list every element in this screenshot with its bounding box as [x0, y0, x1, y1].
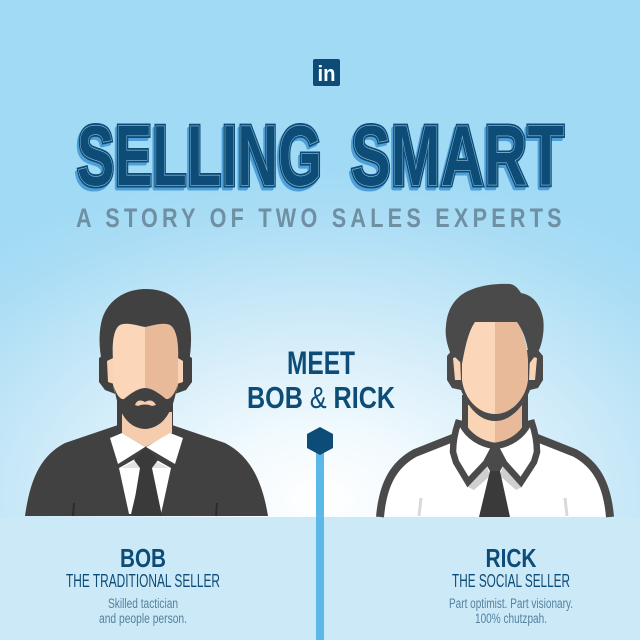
subtitle: A STORY OF TWO SALES EXPERTS	[76, 204, 562, 234]
Rick face left	[462, 320, 495, 414]
text: Bob block	[66, 543, 220, 626]
Bob ears outline	[99, 354, 192, 395]
text: Rick block: RICK	[486, 543, 537, 573]
title: SELLING	[77, 109, 322, 204]
Rick shirt	[380, 436, 610, 517]
title: SELLING	[77, 109, 322, 204]
Rick head outline	[447, 350, 543, 421]
Rick collar	[453, 423, 537, 482]
Bob face right	[145, 324, 178, 430]
Bob shirt	[119, 459, 171, 514]
timeline line	[316, 453, 324, 640]
illustration: Rick	[380, 284, 610, 517]
title: SMART	[351, 109, 564, 204]
Bob hair	[100, 289, 191, 362]
Bob tie	[132, 447, 162, 516]
icon: LinkedIn logo: in	[318, 61, 336, 86]
text: Bob block: THE TRADITIONAL SELLER	[66, 571, 220, 591]
icon: hexagon	[307, 427, 333, 455]
Bob jacket	[25, 425, 268, 516]
text: Rick block: THE SOCIAL SELLER	[452, 571, 570, 591]
Bob face left	[113, 324, 145, 430]
text: Rick block	[449, 543, 573, 626]
Bob beard	[113, 384, 178, 429]
Bob collar	[110, 433, 183, 464]
Rick shirt outline	[380, 436, 610, 517]
Rick face right	[495, 320, 528, 414]
text: Rick block: 100% chutzpah.	[475, 611, 547, 626]
title: SMART	[349, 112, 562, 207]
icon: LinkedIn logo	[313, 59, 340, 86]
Bob neck	[117, 398, 173, 447]
Rick shirt folds	[419, 498, 567, 516]
title: SMART	[351, 109, 564, 204]
Rick neck	[462, 395, 528, 444]
title: SELLING	[75, 112, 320, 207]
illustration: Bob	[25, 289, 268, 516]
title: SMART	[351, 109, 564, 204]
Rick tie	[479, 444, 510, 517]
Rick ear skin	[453, 356, 537, 380]
Bob mouth	[135, 400, 156, 406]
title	[75, 109, 564, 207]
text: Bob block: BOB	[120, 543, 166, 573]
Bob ear skin	[107, 358, 183, 384]
bottom panel	[0, 517, 640, 640]
title: SELLING	[77, 109, 322, 204]
heading: Meet Bob & Rick: BOB & RICK	[247, 380, 395, 415]
Rick hair	[446, 284, 544, 364]
heading: Meet Bob & Rick: MEET	[287, 345, 355, 381]
Rick collar shadow	[468, 466, 522, 490]
text: Bob block: Skilled tactician	[108, 596, 178, 611]
text: Bob block: and people person.	[99, 611, 187, 626]
text: Rick block: Part optimist. Part visionary.	[449, 596, 573, 611]
Bob jacket folds	[73, 503, 217, 516]
heading: Meet Bob & Rick	[247, 345, 395, 415]
